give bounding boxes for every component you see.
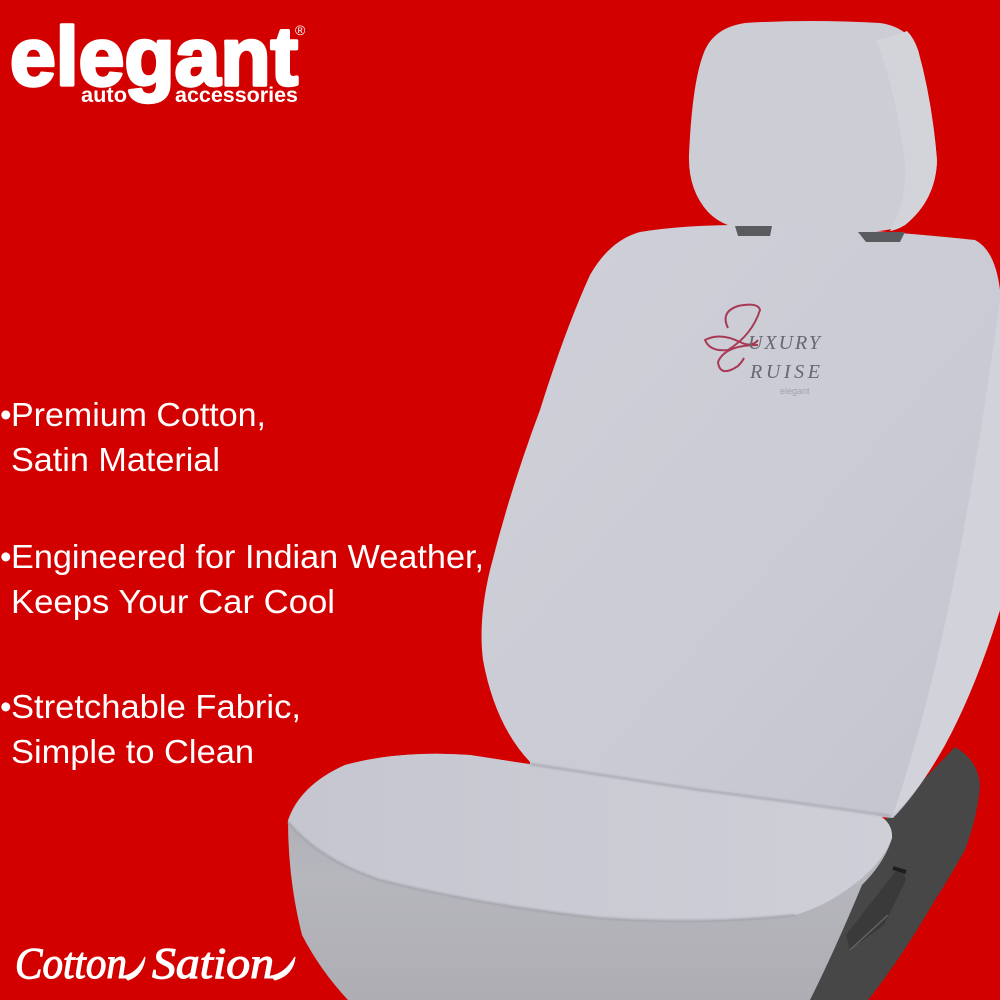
backrest	[482, 225, 1000, 818]
product name script: Cotton	[15, 939, 127, 988]
embroidered logo: luxury cruise: RUISE	[749, 361, 820, 383]
feature: stretchable fabric: Stretchable Fabric,	[11, 688, 301, 725]
logo: elegant auto accessories: auto	[81, 84, 127, 107]
feature: indian weather	[0, 538, 484, 620]
embroidered logo: luxury cruise: elegant	[780, 386, 810, 396]
feature: indian weather: Keeps Your Car Cool	[11, 583, 335, 620]
logo: elegant auto accessories: accessories	[175, 84, 298, 107]
seat cushion	[288, 754, 892, 1000]
logo: elegant auto accessories: elegant	[10, 10, 298, 103]
product name script	[15, 939, 295, 988]
embroidered logo: luxury cruise: UXURY	[748, 332, 822, 354]
feature list	[0, 396, 484, 770]
feature: indian weather: Engineered for Indian Weather,	[11, 538, 484, 575]
feature: indian weather: •	[0, 538, 12, 575]
feature: premium cotton: Satin Material	[11, 441, 220, 478]
feature: stretchable fabric: Simple to Clean	[11, 733, 254, 770]
headrest	[689, 21, 937, 232]
seat illustration	[288, 21, 1000, 1000]
headrest posts	[735, 226, 905, 242]
logo: elegant auto accessories: ®	[295, 22, 306, 38]
product name script: Sation	[152, 939, 274, 988]
dark seat frame	[805, 747, 980, 1000]
feature: premium cotton: •	[0, 396, 12, 433]
feature: premium cotton: Premium Cotton,	[11, 396, 266, 433]
feature: stretchable fabric	[0, 688, 301, 770]
feature: stretchable fabric: •	[0, 688, 12, 725]
feature: premium cotton	[0, 396, 266, 478]
embroidered logo: luxury cruise	[705, 305, 822, 396]
